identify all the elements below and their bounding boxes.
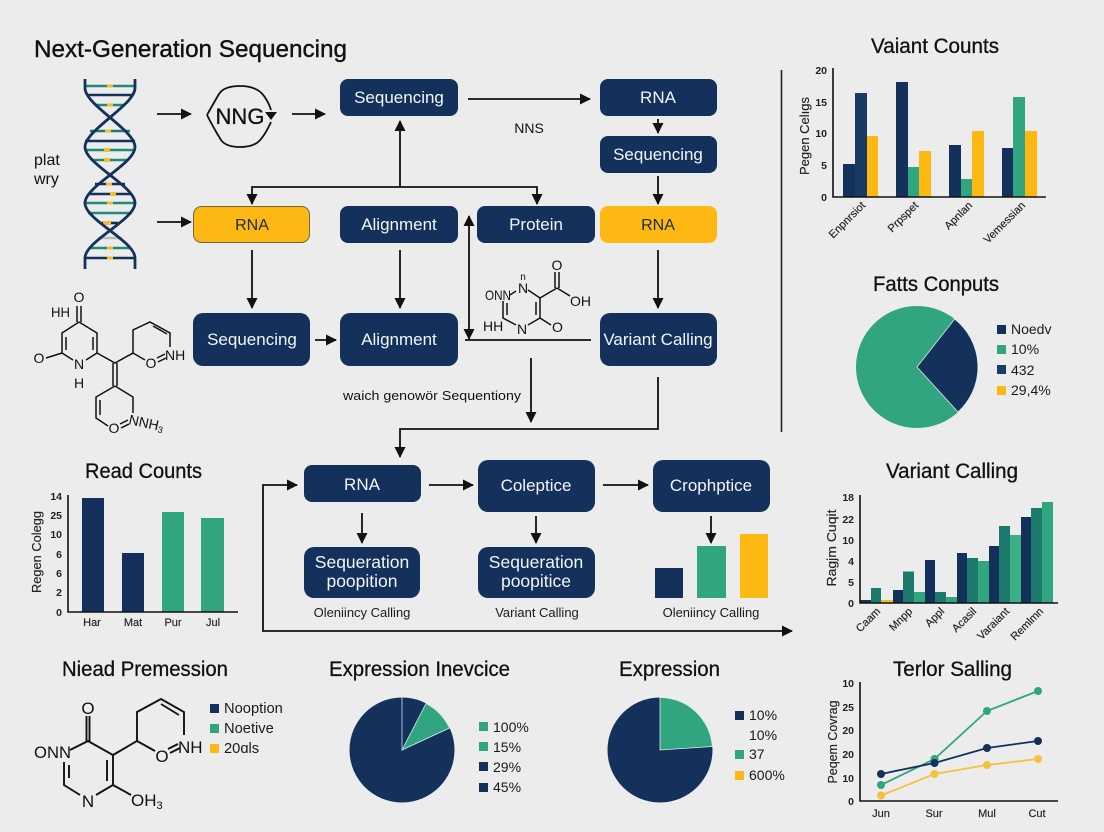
legend: expression: [735, 707, 785, 783]
bar chart: read counts: Pur: [164, 617, 182, 629]
arrow: DNA to RNA: [157, 221, 191, 223]
bar chart: read counts: 14: [50, 491, 62, 503]
bar chart: read counts: Regen Colegg: [29, 511, 44, 593]
line chart: terlor salling: 20: [842, 749, 854, 761]
box: Protein: [477, 206, 595, 243]
box: Alignment lower: [340, 313, 458, 366]
heading: Expression: Expression: [619, 658, 720, 681]
bar chart: read counts: Jul: [206, 617, 220, 629]
arrow: feedback loop: [263, 485, 792, 631]
bar chart: read counts: [29, 491, 238, 629]
bar chart: variant counts: Vemessian: [982, 200, 1028, 246]
icon: NNG cycle: NNG: [216, 104, 264, 129]
box: Sequeration poopition: poopition: [326, 571, 398, 591]
bar chart: variant calling: Acasil: [950, 606, 979, 635]
bar chart: variant calling: Remlmn: [1009, 606, 1046, 643]
line chart: terlor salling: Jun: [872, 808, 890, 820]
bar chart: variant calling: 10: [842, 535, 854, 547]
caption: Oleniincy Calling right: Oleniincy Calling: [663, 605, 759, 620]
molecule: centre carboxylic structure: O: [552, 257, 563, 273]
bar chart: variant calling: 0: [848, 598, 854, 610]
line chart: terlor salling: 20: [842, 725, 854, 737]
legend: facts: 10%: [1011, 341, 1039, 357]
bar chart: variant counts: 0: [821, 192, 827, 204]
molecule: left three-ring structure: O: [34, 350, 45, 366]
bar chart: read counts: 25: [50, 510, 62, 522]
box: RNA yellow right: RNA: [641, 217, 675, 234]
bar chart: read counts: 6: [56, 568, 62, 580]
bar chart: variant counts: 20: [815, 65, 827, 77]
box: Sequeration poopitice: [478, 547, 595, 598]
arrow: Sequencing to yellow RNA: [657, 176, 659, 204]
arrow: down to lower connector: [530, 358, 532, 422]
bar chart: read counts: 6: [56, 549, 62, 561]
arrow: RNA to Coleptice: [429, 484, 473, 486]
arrow: Crophptice down: [710, 516, 712, 543]
line chart: terlor salling: Cut: [1028, 808, 1046, 820]
bar chart: read counts: 2: [56, 587, 62, 599]
molecule: centre carboxylic structure: ONN: [485, 287, 511, 303]
legend: facts: Noedv: [1011, 321, 1051, 337]
legend: expression: 600%: [749, 767, 785, 783]
box: Alignment: Alignment: [361, 215, 437, 234]
line chart: terlor salling: 10: [842, 773, 854, 785]
box: Sequencing lower: [193, 313, 310, 366]
molecule: centre carboxylic structure: n: [520, 272, 526, 283]
molecule: left three-ring structure: O: [109, 420, 120, 436]
legend: expression: 10%: [749, 727, 777, 743]
bar chart: variant counts: 10: [815, 128, 827, 140]
pie chart: facts: [856, 306, 978, 428]
box: Alignment: [340, 206, 458, 243]
heading: Read Counts: Read Counts: [85, 460, 202, 483]
bar chart: variant counts: Apnlan: [942, 200, 975, 232]
bar chart: variant calling: 5: [848, 577, 854, 589]
legend: expression inevcice: 45%: [493, 779, 521, 795]
legend: facts: [997, 321, 1051, 398]
heading: Niead Premession: Niead Premession: [62, 658, 228, 681]
icon: NNG cycle: [207, 86, 277, 147]
bar chart: variant calling: [824, 492, 1058, 643]
molecule: left three-ring structure: NNH: [127, 411, 160, 433]
box: Sequencing top: [340, 79, 458, 116]
box: RNA yellow right: [600, 206, 717, 243]
bar chart: variant counts: 15: [815, 97, 827, 109]
bar chart: variant counts: Pegen Celıgs: [797, 97, 812, 175]
arrow: RNA to Sequencing lower: [251, 250, 253, 308]
box: Variant Calling: [600, 313, 717, 366]
box: RNA yellow left: [194, 206, 310, 242]
molecule: bottom left structure: [34, 699, 203, 812]
line chart: terlor salling: [825, 678, 1058, 820]
bar chart: read counts: Har: [83, 617, 101, 629]
pie chart: expression: [608, 698, 712, 802]
molecule: left three-ring structure: HH: [51, 304, 70, 320]
bar chart: variant counts: 5: [821, 160, 827, 172]
box: Coleptice: Coleptice: [501, 476, 571, 495]
molecule: left three-ring structure: N: [74, 356, 84, 372]
box: RNA top right: RNA: [640, 88, 677, 107]
arrow: Coleptice to Crophptice: [603, 484, 648, 486]
box: RNA top right: [600, 79, 717, 116]
box: Sequeration poopition: Sequeration: [315, 552, 409, 572]
bar chart: read counts: 0: [56, 607, 62, 619]
heading: Terlor Salling: Terlor Salling: [893, 658, 1012, 681]
molecule: centre carboxylic structure: O: [552, 319, 563, 335]
molecule: bottom left structure: OH: [131, 791, 156, 810]
molecule: left three-ring structure: [34, 289, 185, 436]
line chart: terlor salling: Peqem Covrag: [825, 700, 840, 784]
legend: molecule: [210, 701, 283, 757]
box: Sequeration poopitice: poopitice: [501, 571, 571, 591]
molecule: bottom left structure: O: [81, 699, 95, 718]
pie chart: expression inevcice: [350, 698, 454, 802]
legend: expression inevcice: 29%: [493, 759, 521, 775]
box: Sequencing lower: Sequencing: [207, 330, 297, 349]
legend: expression inevcice: [479, 719, 529, 795]
molecule: left three-ring structure: O: [74, 289, 85, 305]
line chart: terlor salling: Mul: [978, 808, 996, 820]
box: Crophptice: [653, 460, 770, 512]
box: RNA yellow left: RNA: [235, 217, 269, 234]
arrow: branch connector up to Sequencing: [399, 121, 401, 187]
box: Alignment lower: Alignment: [361, 330, 437, 349]
molecule: centre carboxylic structure: OH: [570, 293, 591, 309]
molecule: left three-ring structure: 3: [157, 424, 164, 435]
arrow: NNG to Sequencing: [292, 113, 325, 115]
molecule: bottom left structure: 3: [156, 800, 163, 812]
molecule: centre carboxylic structure: HH: [483, 318, 503, 334]
legend: molecule: Noetive: [224, 721, 274, 737]
arrow: RNA to Variant Calling: [657, 250, 659, 308]
line chart: terlor salling: 0: [848, 796, 854, 808]
bar chart: variant calling: Varaiant: [975, 606, 1012, 643]
box: Coleptice: [478, 460, 595, 512]
legend: expression: 37: [749, 746, 765, 762]
molecule: left three-ring structure: H: [74, 375, 84, 391]
bar chart: variant calling: Appl: [923, 606, 947, 630]
bar chart: read counts: Mat: [124, 617, 142, 629]
box: RNA lower row: [304, 465, 421, 502]
box: Sequencing right: [600, 136, 717, 173]
label: plat wry: wry: [33, 171, 59, 188]
heading: Expression Inevcice: Expression Inevcice: [329, 658, 510, 681]
legend: expression inevcice: 100%: [493, 719, 529, 735]
legend: facts: 29,4%: [1011, 382, 1051, 398]
heading: Variant Counts: Vaiant Counts: [871, 35, 999, 58]
molecule: bottom left structure: NH: [178, 738, 203, 757]
arrow: Sequencing to RNA: [468, 98, 590, 100]
label: plat wry: [33, 152, 60, 188]
bar chart: variant counts: Prpspet: [886, 200, 921, 235]
bar chart: variant calling: 4: [848, 556, 854, 568]
label: NNS: NNS: [514, 120, 544, 136]
bar chart: variant calling: 18: [842, 492, 854, 504]
legend: molecule: Nooption: [224, 701, 283, 717]
bar chart: variant counts: Enpnrsiot: [827, 200, 868, 241]
arrow: Coleptice down: [535, 516, 537, 543]
molecule: bottom left structure: O: [155, 747, 169, 766]
caption: flow note: waich genowör Sequentiony: [342, 388, 522, 403]
molecule: centre carboxylic structure: N: [518, 280, 528, 296]
box: Sequencing right: Sequencing: [613, 145, 703, 164]
molecule: centre carboxylic structure: N: [517, 321, 527, 337]
arrow: RNA down: [361, 513, 363, 543]
legend: expression: 10%: [749, 707, 777, 723]
divider: right column rule: [780, 70, 782, 432]
icon: DNA double helix: [85, 79, 135, 269]
legend: facts: 432: [1011, 362, 1035, 378]
heading: Facts Conputs: Fatts Conputs: [873, 273, 999, 296]
caption: Variant Calling: Variant Calling: [495, 605, 579, 620]
mini bar chart: [655, 534, 768, 598]
box: Crophptice: Crophptice: [670, 476, 752, 495]
arrow: Alignment to Alignment lower: [399, 250, 401, 308]
arrow: double vertical connector: [468, 216, 470, 339]
bar chart: variant counts: [797, 65, 1046, 246]
bar chart: variant calling: Caam: [854, 606, 883, 635]
arrow: RNA to Sequencing: [657, 119, 659, 133]
box: Protein: Protein: [509, 215, 563, 234]
arrow: Sequencing to Alignment: [315, 339, 336, 341]
bar chart: variant calling: Mnpp: [887, 606, 915, 634]
heading: Variant Calling: Variant Calling: [886, 460, 1018, 483]
arrow: branch connector to RNA and Protein: [252, 187, 537, 204]
arrow: Variant Calling down to RNA row: [400, 377, 658, 457]
label: plat wry: plat: [34, 152, 60, 169]
arrow: DNA to NNG: [157, 113, 191, 115]
box: Sequencing top: Sequencing: [354, 88, 444, 107]
line chart: terlor salling: 10: [842, 678, 854, 690]
bar chart: variant calling: Ragjm Cuqit: [824, 509, 839, 586]
molecule: bottom left structure: N: [82, 792, 94, 811]
connector: horizontal to Variant Calling: [465, 339, 591, 341]
title: Next-Generation Sequencing: [34, 36, 347, 63]
molecule: centre carboxylic structure: [483, 257, 591, 337]
molecule: left three-ring structure: NH: [165, 347, 185, 363]
box: Variant Calling: Variant Calling: [603, 330, 713, 349]
caption: Oleniincy Calling left: Oleniincy Calling: [314, 605, 410, 620]
legend: expression inevcice: 15%: [493, 739, 521, 755]
line chart: terlor salling: Sur: [925, 808, 943, 820]
molecule: bottom left structure: ONN: [34, 743, 71, 762]
bar chart: read counts: 10: [50, 529, 62, 541]
box: RNA lower row: RNA: [344, 475, 381, 494]
box: Sequeration poopition: [304, 547, 420, 598]
legend: molecule: 20ɑls: [224, 741, 259, 757]
bar chart: variant calling: 22: [842, 514, 854, 526]
molecule: left three-ring structure: O: [146, 355, 157, 371]
box: Sequeration poopitice: Sequeration: [489, 552, 583, 572]
line chart: terlor salling: 25: [842, 702, 854, 714]
